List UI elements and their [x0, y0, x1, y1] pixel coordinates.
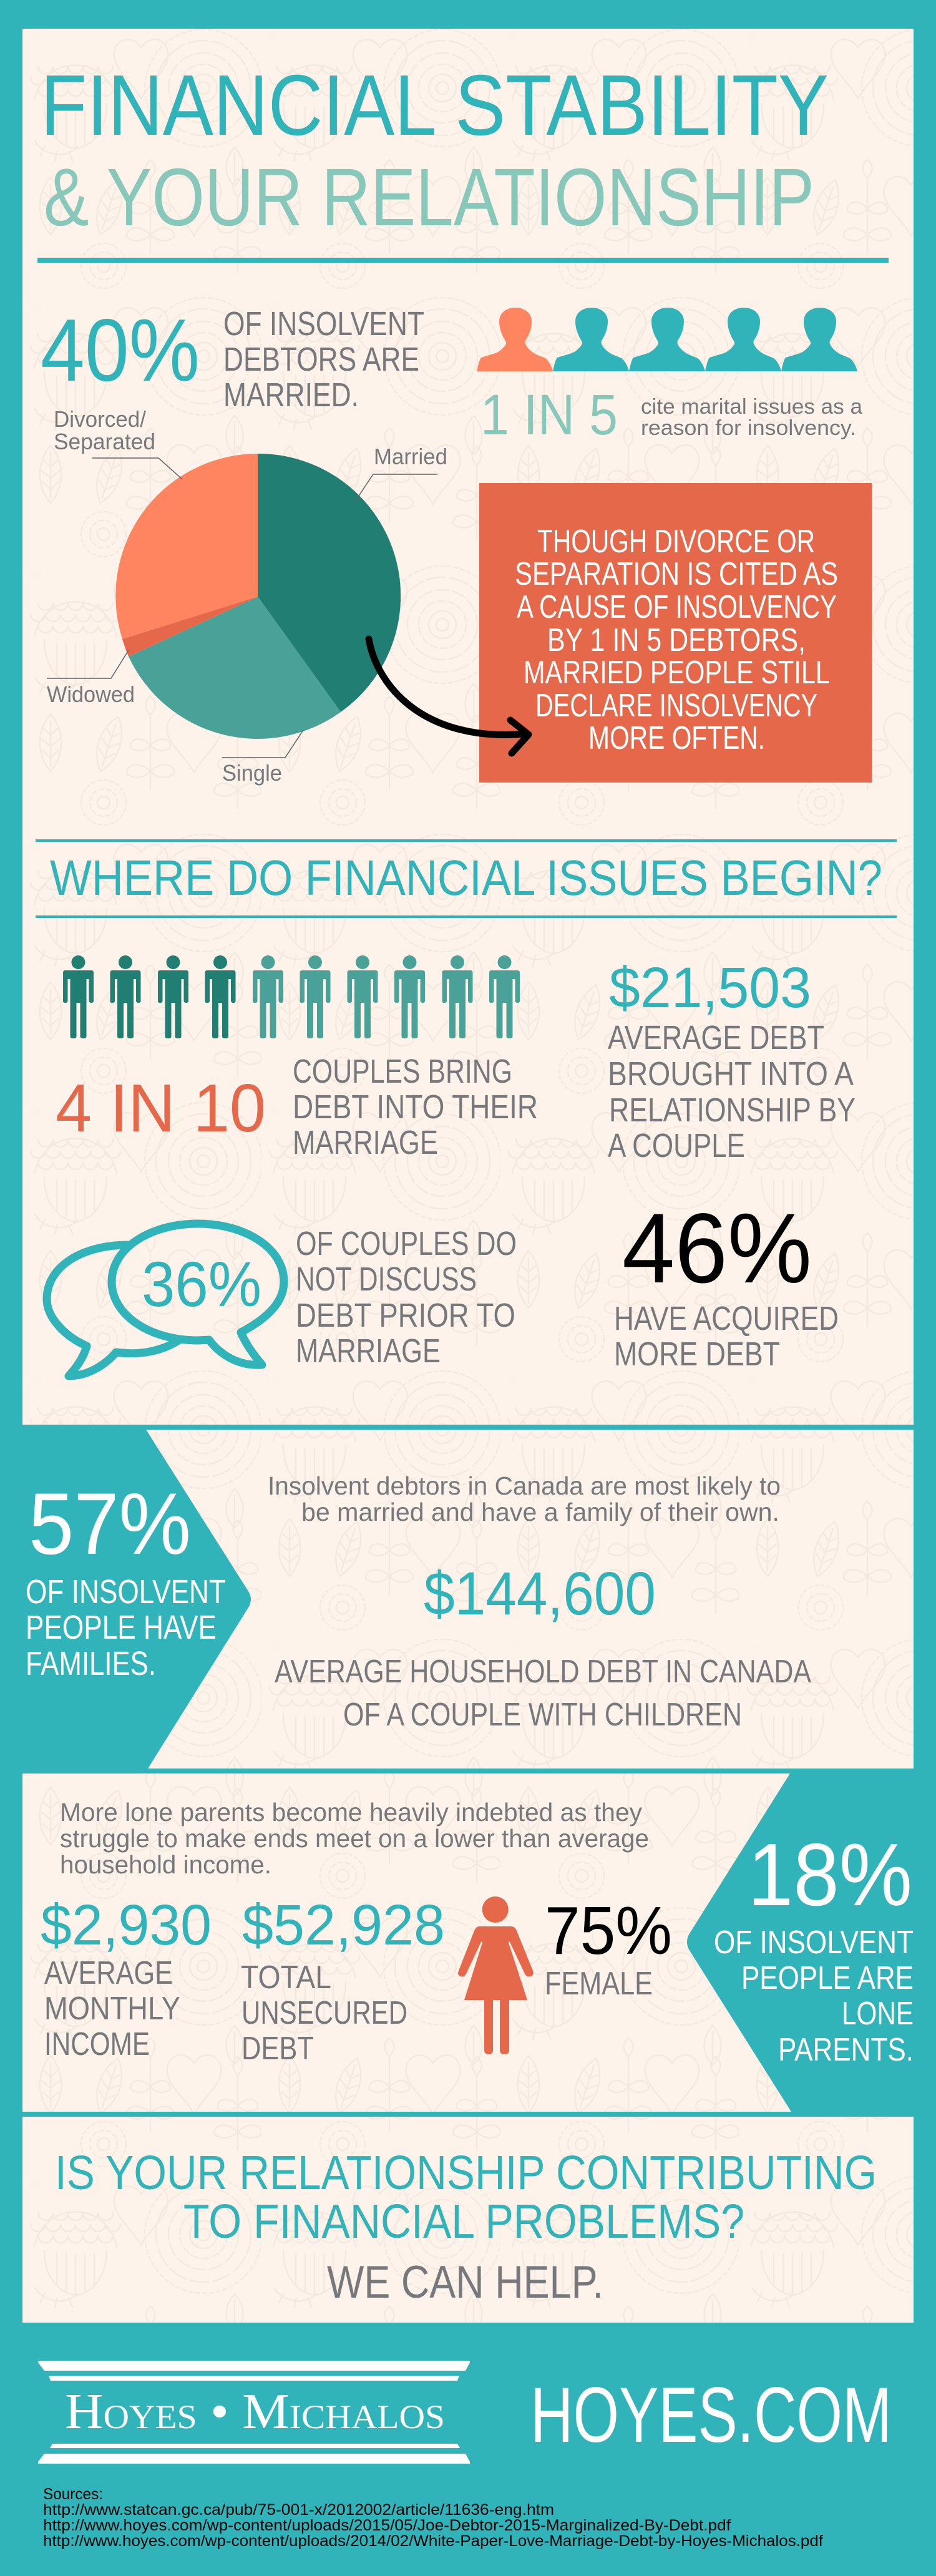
stat: 4 in 10: COUPLES BRING	[293, 1053, 512, 1090]
callout: orange box: DECLARE INSOLVENCY	[535, 688, 817, 724]
stat: $2,930: $2,930	[41, 1893, 212, 1957]
icon: woman	[458, 1896, 533, 2054]
stat: $144,600: $144,600	[424, 1559, 656, 1627]
text: couples do not discuss debt: OF COUPLES DO	[296, 1225, 517, 1262]
icon: speech bubbles with 36%	[47, 1224, 284, 1376]
logo: Hoyes Michalos: HOYES • MICHALOS	[65, 2384, 445, 2439]
stat: 40% married: DEBTORS ARE	[223, 341, 419, 378]
pie chart: marital status: Married	[374, 444, 447, 469]
pie chart: marital status: Separated	[54, 429, 155, 454]
icon row: 4 in 10 couples	[63, 955, 520, 1038]
banner: 57% arrow: PEOPLE HAVE	[26, 1609, 217, 1646]
stat: 1 in 5: cite marital issues as a	[641, 395, 862, 419]
callout: orange box	[479, 483, 872, 783]
banner: 57% arrow: 57%	[29, 1475, 191, 1573]
pie chart: marital status	[47, 406, 447, 786]
stat: $21,503: AVERAGE DEBT	[608, 1019, 824, 1056]
sources	[43, 2486, 823, 2550]
stat: $52,928: UNSECURED	[241, 1995, 407, 2031]
stat: 40% married: 40%	[41, 301, 200, 400]
text block: lone parents: household income.	[60, 1850, 271, 1879]
stat: 40% married: OF INSOLVENT	[223, 305, 424, 343]
banner: 57% arrow: OF INSOLVENT	[26, 1573, 226, 1611]
text block: insolvent debtors in Canada	[268, 1471, 781, 1526]
stat: $2,930	[41, 1893, 212, 2062]
stat: 46%	[614, 1193, 839, 1373]
stat: 4 in 10: 4 IN 10	[56, 1070, 266, 1146]
callout: orange box: MORE OFTEN.	[588, 720, 765, 756]
stat: $21,503: $21,503	[609, 956, 811, 1020]
stat: $21,503	[608, 956, 856, 1164]
stat: $52,928: TOTAL	[241, 1959, 331, 1996]
banner: 57% arrow: FAMILIES.	[26, 1645, 156, 1682]
stat: 4 in 10	[56, 1053, 538, 1161]
callout: orange box: SEPARATION IS CITED AS	[515, 556, 838, 592]
icon: speech bubbles with 36%: 36%	[142, 1249, 261, 1320]
stat: 1 in 5: 1 IN 5	[480, 383, 618, 447]
text block: lone parents	[60, 1798, 649, 1879]
banner: 18% arrow: 18%	[748, 1825, 912, 1925]
stat: $52,928: $52,928	[242, 1893, 445, 1957]
call to action: TO FINANCIAL PROBLEMS?	[183, 2195, 744, 2248]
stat: $52,928	[241, 1893, 445, 2067]
stat: 4 in 10: DEBT INTO THEIR	[293, 1088, 538, 1126]
sources: http://www.hoyes.com/wp-content/uploads/2015/05/Joe-Debtor-2015-Marginalized-By-Debt.pdf	[43, 2517, 731, 2534]
text block: insolvent debtors in Canada: Insolvent debtors in Canada are most likely to	[268, 1471, 781, 1500]
title	[41, 57, 829, 243]
text: couples do not discuss debt: NOT DISCUSS	[296, 1261, 477, 1298]
stat: 4 in 10: MARRIAGE	[293, 1124, 438, 1161]
call to action	[55, 2146, 877, 2308]
stat: 75% female	[545, 1893, 672, 2002]
banner: 57% arrow	[22, 1425, 251, 1773]
arrow: pie to callout	[369, 639, 529, 753]
pie chart: marital status: Widowed	[47, 681, 135, 707]
sources: http://www.hoyes.com/wp-content/uploads/2014/02/White-Paper-Love-Marriage-Debt-by-Hoyes-Michalos.pdf	[43, 2532, 823, 2550]
banner: 18% arrow: LONE	[842, 1996, 914, 2032]
text block: insolvent debtors in Canada: be married and have a family of their own.	[301, 1498, 779, 1526]
sources: Sources:	[43, 2486, 103, 2503]
stat: 75% female: 75%	[545, 1893, 672, 1969]
logo: Hoyes Michalos	[38, 2361, 470, 2464]
stat: 75% female: FEMALE	[545, 1966, 653, 2002]
stat: $2,930: AVERAGE	[44, 1955, 173, 1991]
stat: $2,930: INCOME	[44, 2026, 150, 2062]
title: FINANCIAL STABILITY	[41, 57, 829, 154]
sources: http://www.statcan.gc.ca/pub/75-001-x/2012002/article/11636-eng.htm	[43, 2501, 554, 2519]
stat: 46%: MORE DEBT	[614, 1335, 780, 1373]
stat: 46%: HAVE ACQUIRED	[614, 1300, 839, 1337]
stat: $144,600	[275, 1559, 811, 1733]
stat: 1 in 5: reason for insolvency.	[641, 416, 856, 440]
text: couples do not discuss debt: DEBT PRIOR TO	[296, 1297, 515, 1334]
icon row: 1 in 5 people	[477, 308, 857, 371]
stat: 46%: 46%	[622, 1193, 812, 1304]
pie chart: marital status: Single	[222, 760, 282, 786]
callout: orange box: BY 1 IN 5 DEBTORS,	[547, 622, 806, 658]
callout: orange box: A CAUSE OF INSOLVENCY	[517, 589, 837, 625]
callout: orange box: THOUGH DIVORCE OR	[537, 524, 815, 560]
text: couples do not discuss debt	[296, 1225, 517, 1370]
stat: $2,930: MONTHLY	[44, 1991, 180, 2027]
stat: $21,503: A COUPLE	[608, 1127, 745, 1164]
stat: $144,600: AVERAGE HOUSEHOLD DEBT IN CANADA	[275, 1654, 811, 1690]
banner: 18% arrow	[687, 1769, 914, 2117]
call to action: WE CAN HELP.	[327, 2257, 603, 2308]
callout: orange box: MARRIED PEOPLE STILL	[524, 655, 830, 691]
stat: $21,503: BROUGHT INTO A	[608, 1055, 854, 1093]
text: couples do not discuss debt: MARRIAGE	[296, 1332, 441, 1370]
stat: $21,503: RELATIONSHIP BY	[609, 1091, 856, 1129]
stat: 1 in 5	[480, 383, 862, 447]
pie chart: marital status: Divorced/	[54, 406, 146, 432]
banner: 18% arrow: PARENTS.	[778, 2032, 914, 2068]
text block: lone parents: struggle to make ends meet on a lower than average	[60, 1824, 649, 1853]
stat: 40% married	[41, 301, 424, 414]
stat: $52,928: DEBT	[241, 2031, 314, 2067]
stat: 40% married: MARRIED.	[223, 376, 359, 414]
text block: lone parents: More lone parents become heavily indebted as they	[60, 1798, 642, 1827]
stat: $144,600: OF A COUPLE WITH CHILDREN	[343, 1697, 742, 1733]
